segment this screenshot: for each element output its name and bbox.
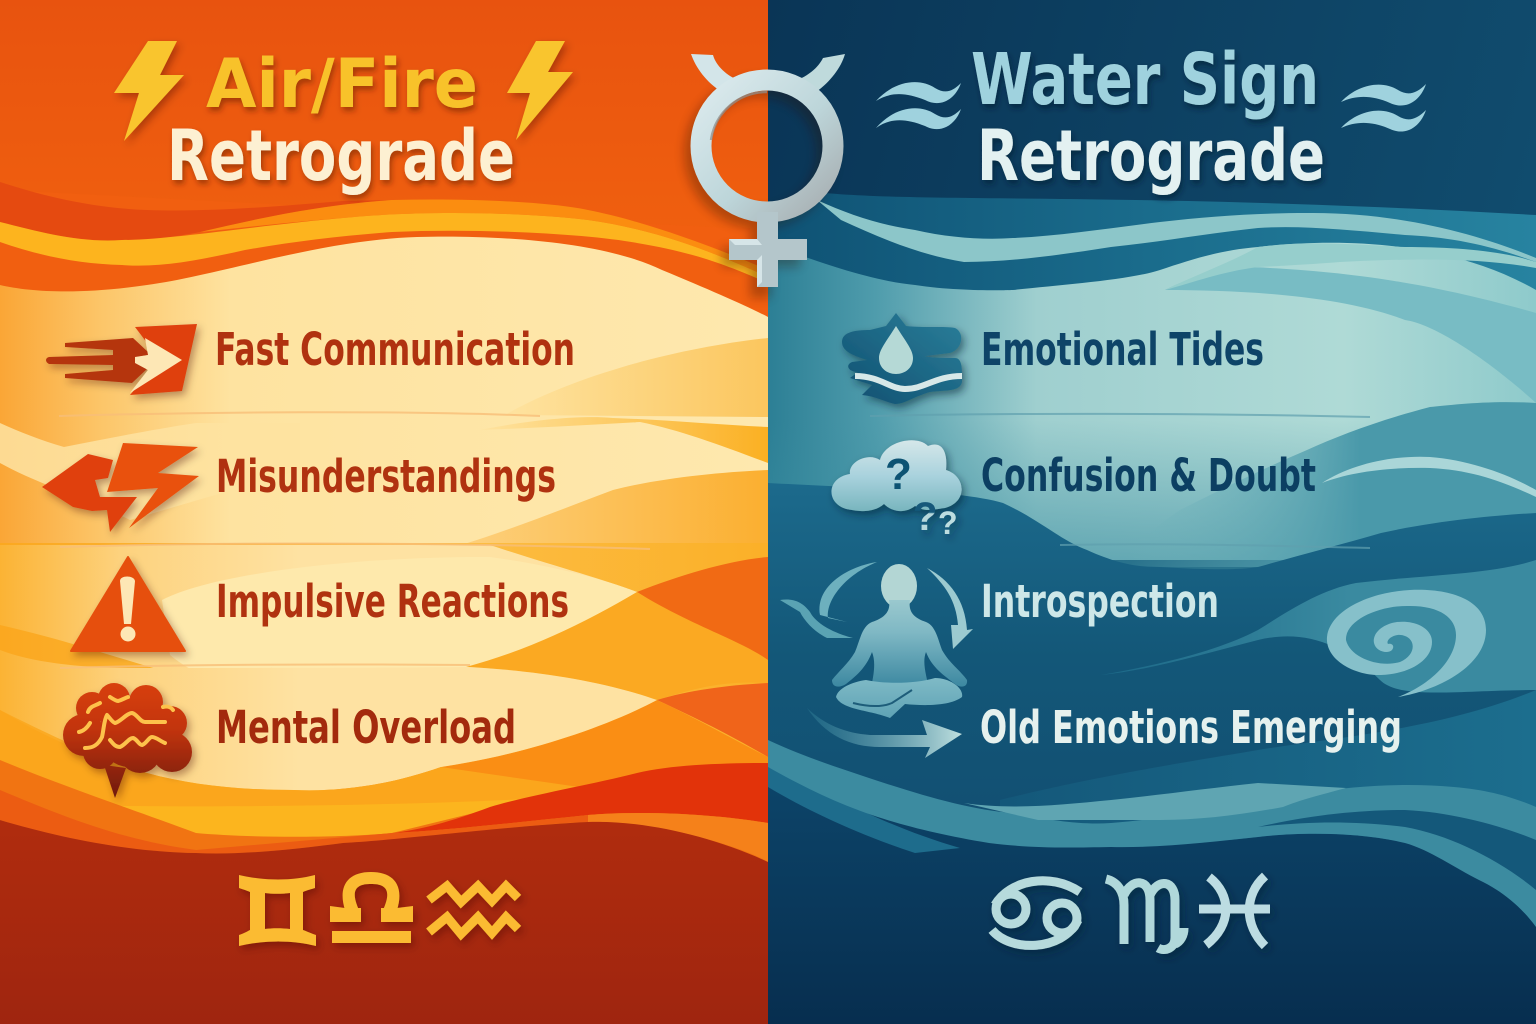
icon: lightning right [507,41,573,140]
heading: air/fire [167,45,515,197]
icon: speeding arrow [46,324,197,395]
heading: water sign: Water Sign [971,38,1319,121]
panel: water sign background [768,0,1536,1024]
icon: meditating person [780,562,973,718]
aquarius [429,886,518,934]
icon: broken bolts [42,443,199,532]
icon: brain [63,683,192,798]
cross [729,212,807,287]
item: emotional tides [842,313,1264,404]
icon: cloud with question marks: ? [938,505,958,541]
ring [701,80,833,212]
item: mental overload [63,683,516,798]
label: Misunderstandings [216,450,556,503]
label: Confusion & Doubt [981,449,1316,502]
pisces [1199,876,1270,946]
item: old emotions emerging [807,701,1402,758]
panel: air/fire background [0,0,768,1024]
zodiac: air signs [239,872,518,946]
icon: waves left [876,82,961,129]
item: confusion and doubt [831,440,1316,541]
item: misunderstandings [42,443,556,532]
heading: air/fire: Air/Fire [206,45,478,124]
icon: waves right [1341,84,1426,132]
icon: warning triangle [71,557,185,651]
label: Mental Overload [216,701,516,754]
scorpio [1106,879,1184,950]
libra [330,872,413,943]
icon: cloud with question marks: ? [913,495,937,539]
right horn [795,54,845,92]
gemini [239,875,316,946]
icon: water drop with waves [842,313,962,404]
label: Impulsive Reactions [216,575,569,628]
item: introspection [780,562,1219,718]
heading: air/fire: Retrograde [167,115,515,197]
heading: water sign: Retrograde [977,115,1325,197]
icon: cloud with question marks [831,440,962,541]
list: water items [780,313,1402,758]
icon: cloud with question marks: ? [885,450,912,499]
item: impulsive reactions [71,557,569,651]
top waves [0,233,768,317]
cancer [992,881,1080,945]
heading: water sign [971,38,1325,197]
left horn [691,54,740,92]
label: Fast Communication [215,323,575,376]
list: air/fire items [42,323,575,798]
zodiac: water signs [992,876,1270,950]
label: Introspection [981,575,1219,628]
label: Emotional Tides [981,323,1264,376]
label: Old Emotions Emerging [980,701,1402,754]
item: fast communication [46,323,575,395]
swirl [1327,590,1486,697]
mercury symbol [691,54,845,298]
icon: lightning left [114,41,184,141]
icon: flowing arrow [807,708,962,758]
